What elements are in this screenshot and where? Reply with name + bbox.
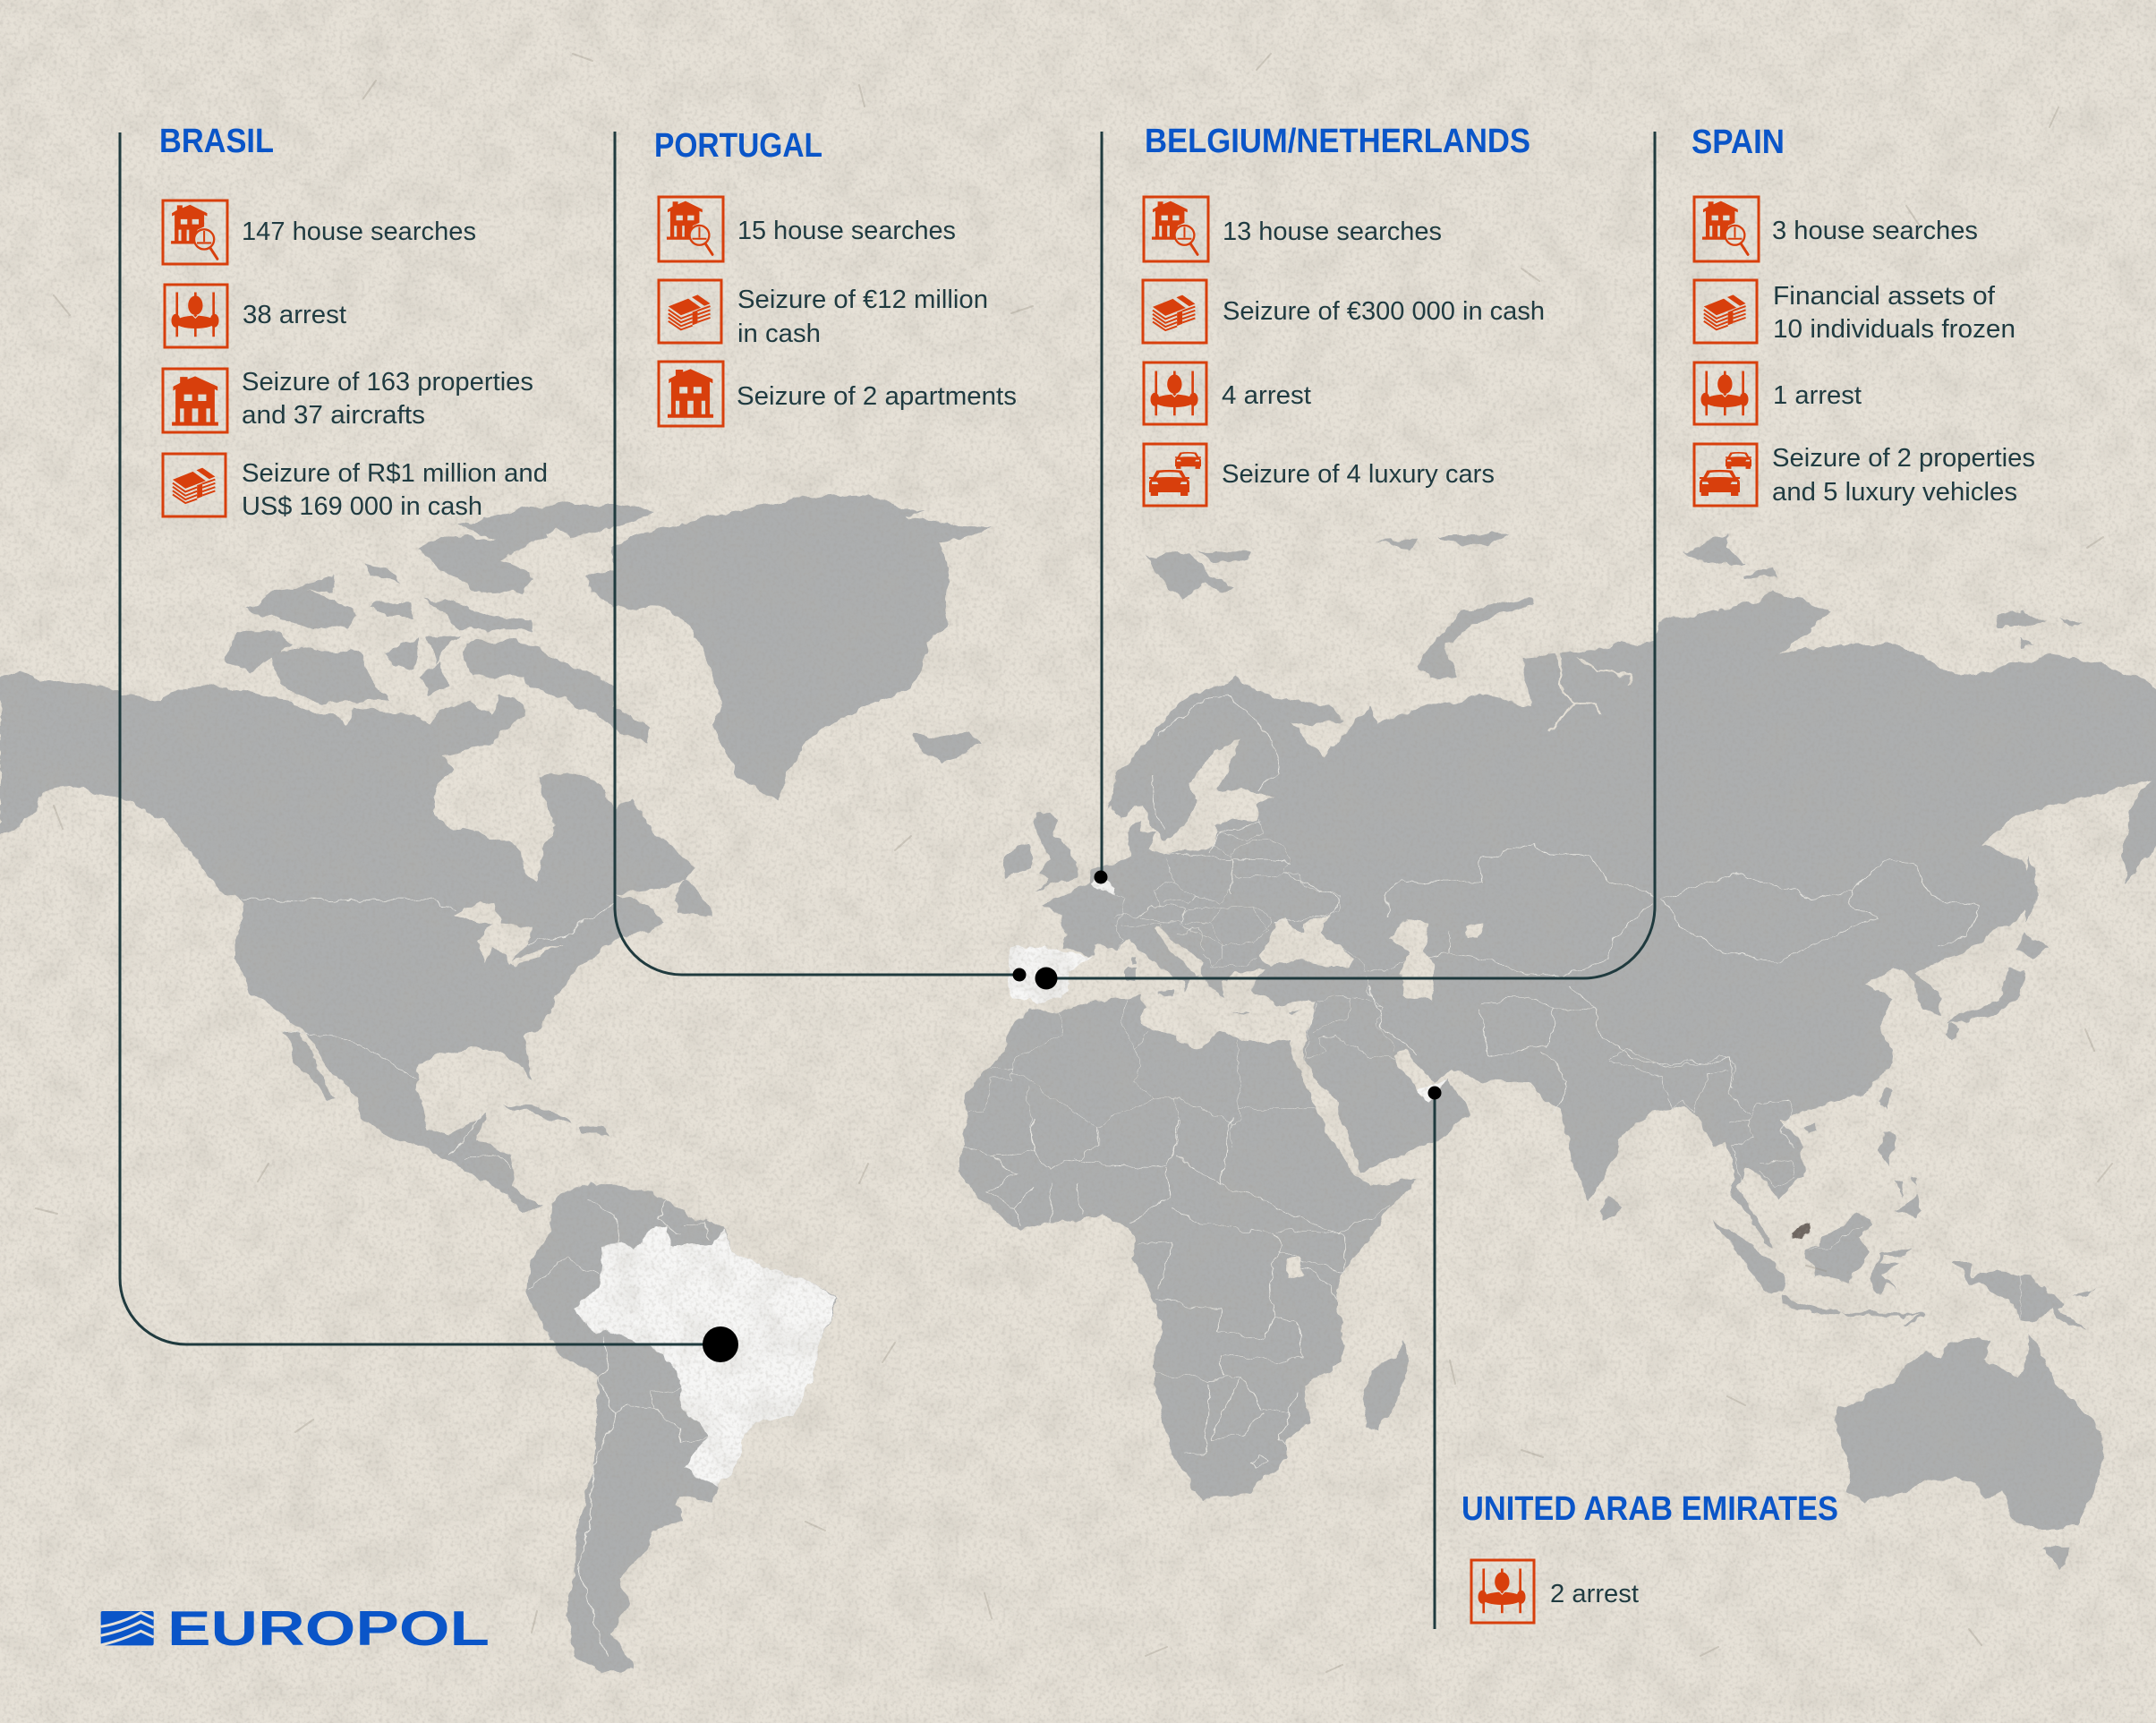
Great Britain xyxy=(1034,813,1081,891)
item: apartments: Seizure of 2 apartments xyxy=(737,382,1017,411)
item: house searches: 147 house searches xyxy=(242,218,476,246)
heading: Spain: SPAIN xyxy=(1692,124,1785,161)
item: arrests xyxy=(1694,363,1862,424)
South-east Asia and Oceania xyxy=(1611,1049,2105,1569)
connector: Brasil xyxy=(120,132,720,1344)
item: properties and vehicles: Seizure of 2 properties xyxy=(1772,444,2035,473)
item: house searches: 3 house searches xyxy=(1772,217,1978,245)
item: luxury cars xyxy=(1144,444,1495,506)
item: house searches: 15 house searches xyxy=(737,217,956,245)
item: properties and vehicles: and 5 luxury vehicles xyxy=(1772,478,2017,507)
item: house searches xyxy=(163,200,476,264)
panel: Belgium/Netherlands xyxy=(1143,123,1545,506)
Europe detail xyxy=(967,813,1405,1146)
Iberia highlight xyxy=(1009,946,1094,1005)
panel: Brasil xyxy=(159,123,548,521)
item: apartments xyxy=(659,362,1017,426)
item: house searches xyxy=(659,197,956,261)
item: cash: US$ 169 000 in cash xyxy=(242,492,482,521)
item: cash: in cash xyxy=(737,320,821,348)
world map xyxy=(0,495,2156,1672)
item: properties xyxy=(163,368,533,432)
Arctic and north-east Asia xyxy=(1146,533,2084,1114)
heading: Belgium/Netherlands: BELGIUM/NETHERLANDS xyxy=(1145,123,1530,160)
Ireland xyxy=(1004,846,1032,877)
Africa and Eurasia xyxy=(958,590,2156,1500)
item: arrests xyxy=(1144,363,1311,424)
item: arrests xyxy=(1471,1560,1639,1623)
item: arrests: 38 arrest xyxy=(243,301,346,329)
item: arrests xyxy=(165,285,346,347)
location dots xyxy=(703,870,1441,1362)
logo wordmark: EUROPOL xyxy=(167,1600,490,1656)
item: cash xyxy=(163,454,548,521)
Mediterranean islands xyxy=(1128,954,1300,1016)
item: frozen assets: Financial assets of xyxy=(1773,282,1996,311)
item: arrests: 4 arrest xyxy=(1222,381,1311,410)
item: house searches xyxy=(1144,197,1442,261)
seas cut out of land xyxy=(1087,652,1632,1277)
item: properties and vehicles xyxy=(1694,444,2035,507)
panel: Spain xyxy=(1692,124,2035,507)
Belgium highlight xyxy=(1089,877,1114,893)
panel: Portugal xyxy=(654,127,1017,426)
connector: Spain xyxy=(1046,132,1655,978)
item: cash xyxy=(659,280,988,348)
heading: Brasil: BRASIL xyxy=(159,123,274,160)
item: cash: Seizure of R$1 million and xyxy=(242,459,548,488)
North America and Greenland xyxy=(0,495,992,1211)
item: frozen assets: 10 individuals frozen xyxy=(1773,315,2015,344)
connector: United Arab Emirates xyxy=(1434,1093,1436,1629)
item: house searches: 13 house searches xyxy=(1223,218,1442,246)
heading: Portugal: PORTUGAL xyxy=(654,127,822,165)
item: luxury cars: Seizure of 4 luxury cars xyxy=(1222,460,1495,489)
item: arrests: 2 arrest xyxy=(1550,1580,1639,1608)
item: frozen assets xyxy=(1694,280,2015,344)
item: arrests: 1 arrest xyxy=(1773,381,1862,410)
UAE highlight xyxy=(1419,1080,1450,1101)
heading: United Arab Emirates: UNITED ARAB EMIRATES xyxy=(1461,1490,1838,1528)
Sri Lanka xyxy=(1598,1196,1622,1217)
item: properties: Seizure of 163 properties xyxy=(242,368,533,397)
item: properties: and 37 aircrafts xyxy=(242,401,425,430)
item: cash: Seizure of €300 000 in cash xyxy=(1223,297,1545,326)
South America xyxy=(526,1182,838,1672)
Europol logo xyxy=(101,1600,490,1656)
Brasil highlight xyxy=(575,1224,837,1487)
Great Lakes xyxy=(453,901,564,965)
connector: Portugal xyxy=(615,132,1019,975)
connector: Belgium/Netherlands xyxy=(1101,132,1103,877)
Africa islands and borders xyxy=(961,1119,1410,1470)
item: cash xyxy=(1143,280,1545,343)
logo flag xyxy=(101,1611,154,1645)
panel: United Arab Emirates xyxy=(1461,1490,1838,1623)
item: cash: Seizure of €12 million xyxy=(737,286,988,314)
item: house searches xyxy=(1694,197,1978,261)
